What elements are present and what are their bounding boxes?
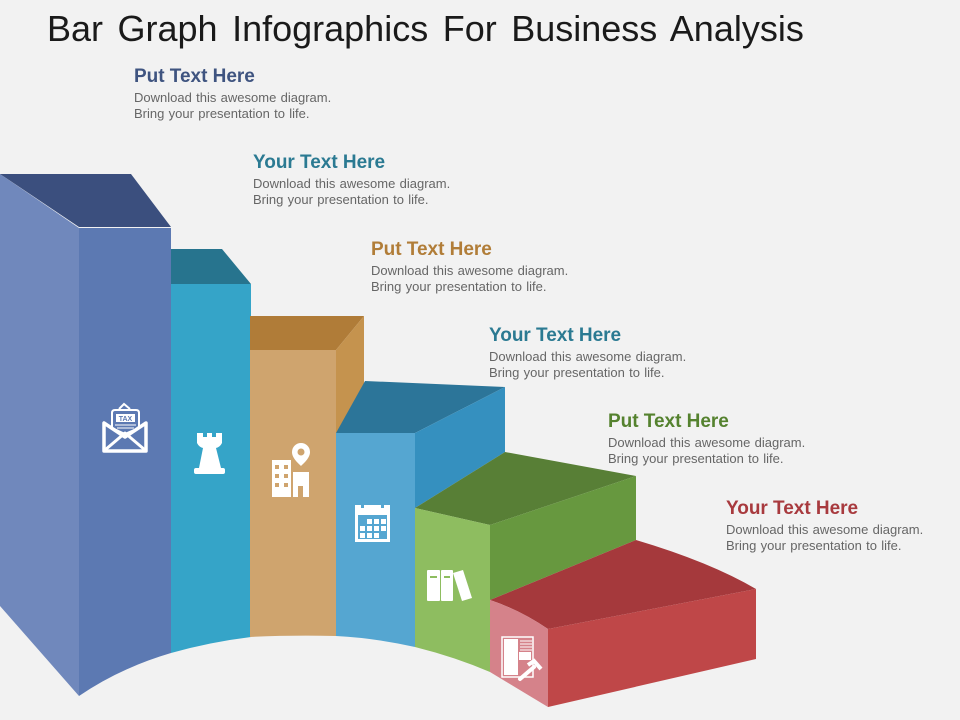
text block 4 — [489, 325, 686, 380]
icon: buildings and map pin — [272, 443, 310, 497]
text block 4: Download this awesome diagram. — [489, 349, 686, 364]
text block 1 — [134, 66, 331, 121]
text block 3: Download this awesome diagram. — [371, 263, 568, 278]
text block 2: Your Text Here — [253, 152, 385, 173]
bar 5: green — [415, 452, 636, 672]
text block 3: Put Text Here — [371, 239, 492, 260]
icon: chess rook — [194, 433, 225, 474]
bar 6: red — [490, 540, 756, 707]
icon: tax envelope — [104, 404, 146, 451]
icon: tax envelope: TAX — [119, 416, 133, 423]
text block 4: Your Text Here — [489, 325, 621, 346]
icon: books — [427, 570, 472, 601]
text block 5: Bring your presentation to life. — [608, 451, 784, 466]
text block 6: Your Text Here — [726, 498, 858, 519]
text block 3: Bring your presentation to life. — [371, 279, 547, 294]
bar 2: teal — [171, 249, 251, 653]
text block 6: Download this awesome diagram. — [726, 522, 923, 537]
text block 1: Bring your presentation to life. — [134, 106, 310, 121]
bar 3: tan — [250, 316, 364, 637]
text block 6 — [726, 498, 923, 553]
icon: blueprint and hammer — [502, 637, 541, 679]
bar 4: blue — [336, 381, 505, 647]
text block 2: Bring your presentation to life. — [253, 192, 429, 207]
text block 1: Download this awesome diagram. — [134, 90, 331, 105]
text block 5 — [608, 411, 805, 466]
text block 5: Put Text Here — [608, 411, 729, 432]
text block 6: Bring your presentation to life. — [726, 538, 902, 553]
bar 1: navy blue — [0, 174, 171, 696]
text block 4: Bring your presentation to life. — [489, 365, 665, 380]
text block 5: Download this awesome diagram. — [608, 435, 805, 450]
text block 2 — [253, 152, 450, 207]
title: Bar Graph Infographics For Business Analysis — [47, 8, 804, 49]
icon: calendar — [355, 505, 390, 542]
text block 1: Put Text Here — [134, 66, 255, 87]
text block 2: Download this awesome diagram. — [253, 176, 450, 191]
text block 3 — [371, 239, 568, 294]
